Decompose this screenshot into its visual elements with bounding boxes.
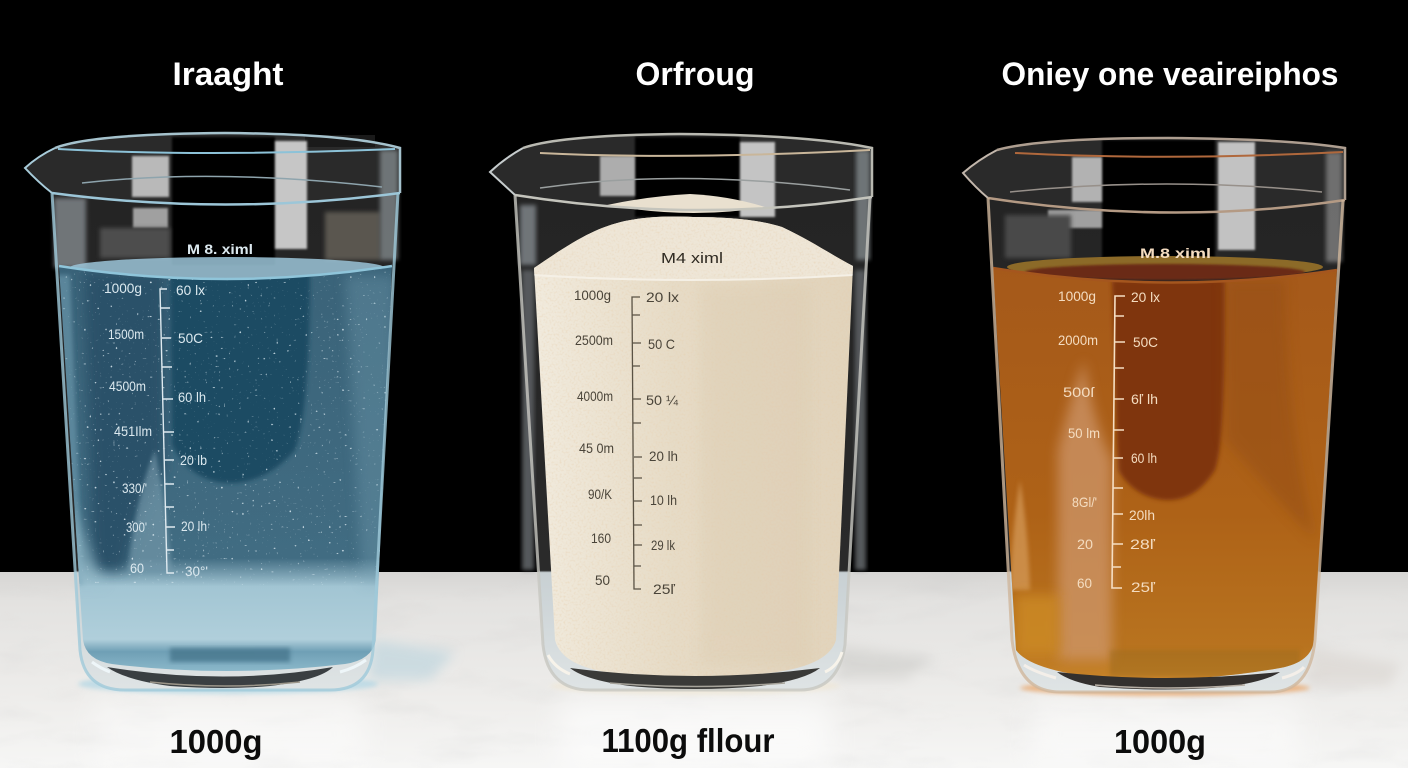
scale: water xyxy=(104,241,253,579)
beaker: amber liquid xyxy=(963,138,1345,696)
scale: amber: 60 xyxy=(1077,575,1092,591)
scale: water: 1000g xyxy=(104,280,142,296)
scale: flour: 50 C xyxy=(648,336,675,352)
glass outline xyxy=(490,134,872,690)
flour mound top xyxy=(607,194,765,213)
scale: amber: 1000g xyxy=(1058,288,1096,304)
glass outline xyxy=(963,138,1345,692)
amber liquid body xyxy=(985,255,1345,685)
caption: middle: 1100g fllour xyxy=(602,722,775,759)
scale: water: 451Ilm xyxy=(114,423,152,439)
scale: amber: 2000m xyxy=(1058,332,1098,348)
scale: flour: 29 lk xyxy=(651,537,676,553)
scale: amber: 8Gl/' xyxy=(1072,494,1097,510)
scale: amber: 50 lm xyxy=(1068,425,1100,441)
scale: water: 300' xyxy=(126,519,147,535)
beaker: water xyxy=(25,133,400,694)
scale: water: 50C xyxy=(178,330,203,346)
scale: flour: 2500m xyxy=(575,332,613,348)
scale: flour: 20 lx xyxy=(646,289,679,305)
glass base xyxy=(92,660,366,688)
scale: flour: 50 ¼ xyxy=(646,392,678,408)
scale: flour: 1000g xyxy=(574,287,611,303)
scale: flour: 45 0m xyxy=(579,440,614,456)
scale: amber: 28ľ xyxy=(1130,536,1156,552)
scale: amber: 25ľ xyxy=(1131,579,1156,595)
scale: water: 330/' xyxy=(122,480,147,496)
scale: water: 4500m xyxy=(109,378,146,394)
scale: amber: 6ľ lh xyxy=(1131,391,1158,407)
scale: amber xyxy=(1058,245,1211,595)
water body xyxy=(50,255,400,680)
amber surface xyxy=(1007,256,1323,280)
scale: amber: 20 xyxy=(1077,536,1093,552)
scale: flour: 4000m xyxy=(577,388,613,404)
scale: amber: 20lh xyxy=(1129,507,1155,523)
scale: flour xyxy=(574,250,723,597)
scale: water: 30°' xyxy=(185,563,208,579)
caption: left: 1000g xyxy=(170,723,262,760)
scale: amber: 60 lh xyxy=(1131,450,1157,466)
scale: water: 60 lh xyxy=(178,389,206,405)
scale: flour: 10 lh xyxy=(650,492,677,508)
title: middle column: Orfroug xyxy=(636,56,754,92)
title: right column: Oniey one veaireiphos xyxy=(1002,56,1338,92)
flour body xyxy=(525,210,860,685)
scale: flour: 90/K xyxy=(588,486,613,502)
glass base xyxy=(1024,665,1304,690)
scale: amber: 20 lx xyxy=(1131,289,1160,305)
scale: flour: M4 ximl xyxy=(661,250,723,267)
water surface xyxy=(69,257,385,279)
scale: amber: 500ſ xyxy=(1063,384,1095,400)
scale: flour: 20 lh xyxy=(649,448,678,464)
scale: water: 1500m xyxy=(108,326,144,342)
scale: water: 60 lx xyxy=(176,282,205,298)
beaker: flour xyxy=(490,134,872,695)
glass outline xyxy=(25,133,400,690)
scale: water: 20 lh xyxy=(181,518,207,534)
scale: water: 60 xyxy=(130,560,144,576)
scale: flour: 50 xyxy=(595,572,610,588)
caption: right: 1000g xyxy=(1114,723,1206,760)
background: black backdrop xyxy=(0,0,1408,572)
glass base xyxy=(548,652,842,689)
scale: amber: 50C xyxy=(1133,334,1158,350)
title: left column: Iraaght xyxy=(172,56,284,92)
marble table top xyxy=(0,572,1408,768)
scale: water: 20 lb xyxy=(180,452,207,468)
scale: flour: 160 xyxy=(591,530,611,546)
scale: water: M 8. ximl xyxy=(187,241,253,257)
scale: flour: 25ľ xyxy=(653,581,676,597)
scale: amber: M.8 ximl xyxy=(1140,245,1211,261)
